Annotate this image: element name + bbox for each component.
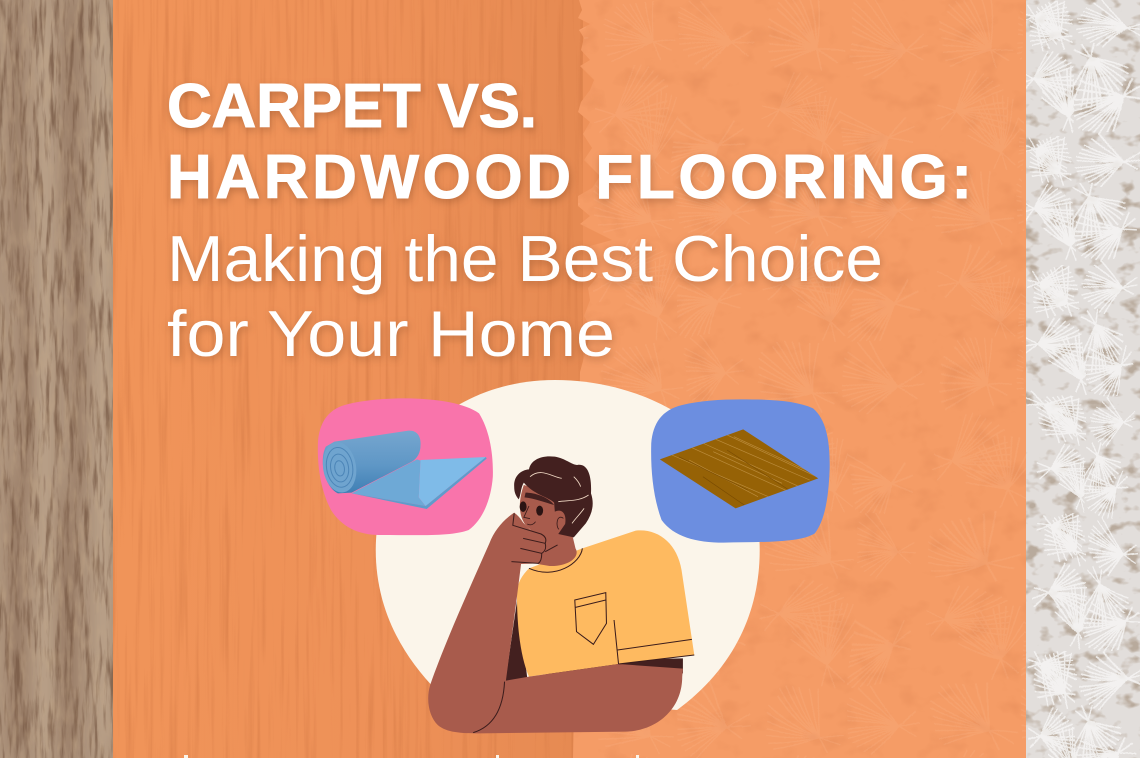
panel: hardwood strip left xyxy=(0,0,113,758)
bubble: carpet roll option xyxy=(318,398,493,535)
character: torso shadow xyxy=(505,597,683,682)
panel: orange carpet section xyxy=(570,0,1026,758)
subtitle: making the best choice for your home: Making the Best Choice xyxy=(167,222,883,295)
clipped next-section marks at bottom edge xyxy=(184,755,639,758)
bubble: hardwood option xyxy=(651,399,830,543)
character: arm and hand xyxy=(428,513,683,733)
cream circle backdrop xyxy=(376,380,760,710)
title: carpet vs hardwood flooring: HARDWOOD FLOORING: xyxy=(167,143,972,212)
character: facial features xyxy=(520,473,589,529)
character: hair xyxy=(514,456,593,537)
character: finger and collar lines xyxy=(473,513,694,733)
title: carpet vs hardwood flooring: CARPET VS. xyxy=(167,72,537,141)
character: yellow t-shirt xyxy=(517,530,694,677)
title: carpet vs hardwood flooring xyxy=(167,72,972,212)
icon: rolled carpet xyxy=(320,431,487,509)
panel: orange wood section xyxy=(113,0,583,758)
illustration: person choosing between carpet and hardwood xyxy=(318,380,830,733)
subtitle: making the best choice for your home xyxy=(167,222,883,370)
panel: white shag carpet strip right xyxy=(1026,0,1140,758)
character: neck and face xyxy=(520,485,577,566)
subtitle: making the best choice for your home: for Your Home xyxy=(167,297,615,370)
icon: hardwood plank square xyxy=(660,429,818,508)
